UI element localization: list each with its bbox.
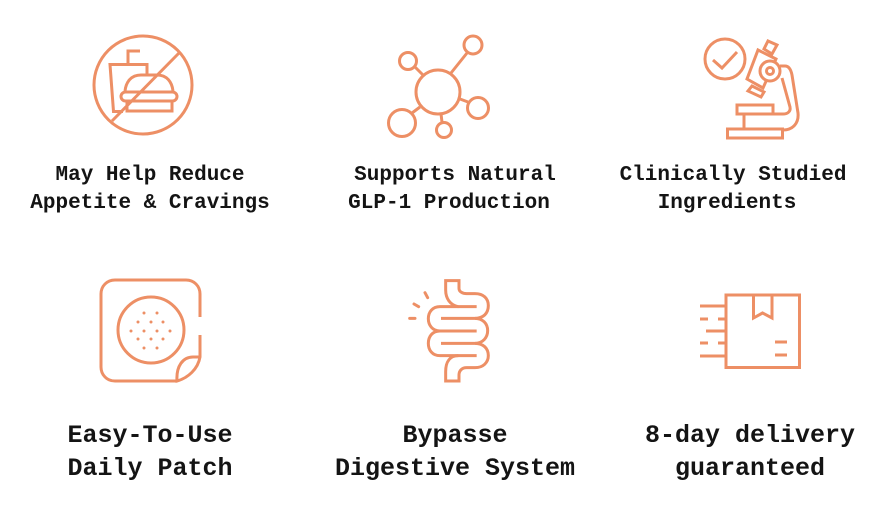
heading: GLP-1	[348, 164, 556, 215]
heading: GLP-1: GLP-1 Production	[348, 192, 550, 215]
icon: intestine	[410, 281, 488, 381]
heading: clinically studied: Ingredients	[658, 192, 796, 215]
heading: appetite: May Help Reduce	[55, 164, 245, 187]
heading: patch	[67, 421, 233, 483]
heading: digestive: Digestive System	[335, 454, 575, 483]
icon: no fast food	[94, 36, 192, 134]
icon: delivery box	[700, 295, 800, 368]
heading: clinically studied	[620, 164, 846, 215]
heading: delivery: 8-day delivery	[645, 421, 855, 450]
icon: molecule	[388, 36, 488, 138]
icon: patch	[101, 280, 200, 381]
heading: patch: Easy-To-Use	[67, 421, 233, 450]
heading: GLP-1: Supports Natural	[354, 164, 556, 187]
heading: patch: Daily Patch	[67, 454, 233, 483]
icon: microscope	[705, 39, 798, 138]
heading: digestive	[335, 421, 575, 483]
heading: digestive: Bypasse	[402, 421, 508, 450]
heading: delivery: guaranteed	[675, 454, 825, 483]
heading: delivery	[645, 421, 855, 483]
patch dots	[130, 312, 172, 350]
heading: appetite	[30, 164, 270, 215]
heading: appetite: Appetite & Cravings	[30, 192, 270, 215]
heading: clinically studied: Clinically Studied	[620, 164, 846, 187]
